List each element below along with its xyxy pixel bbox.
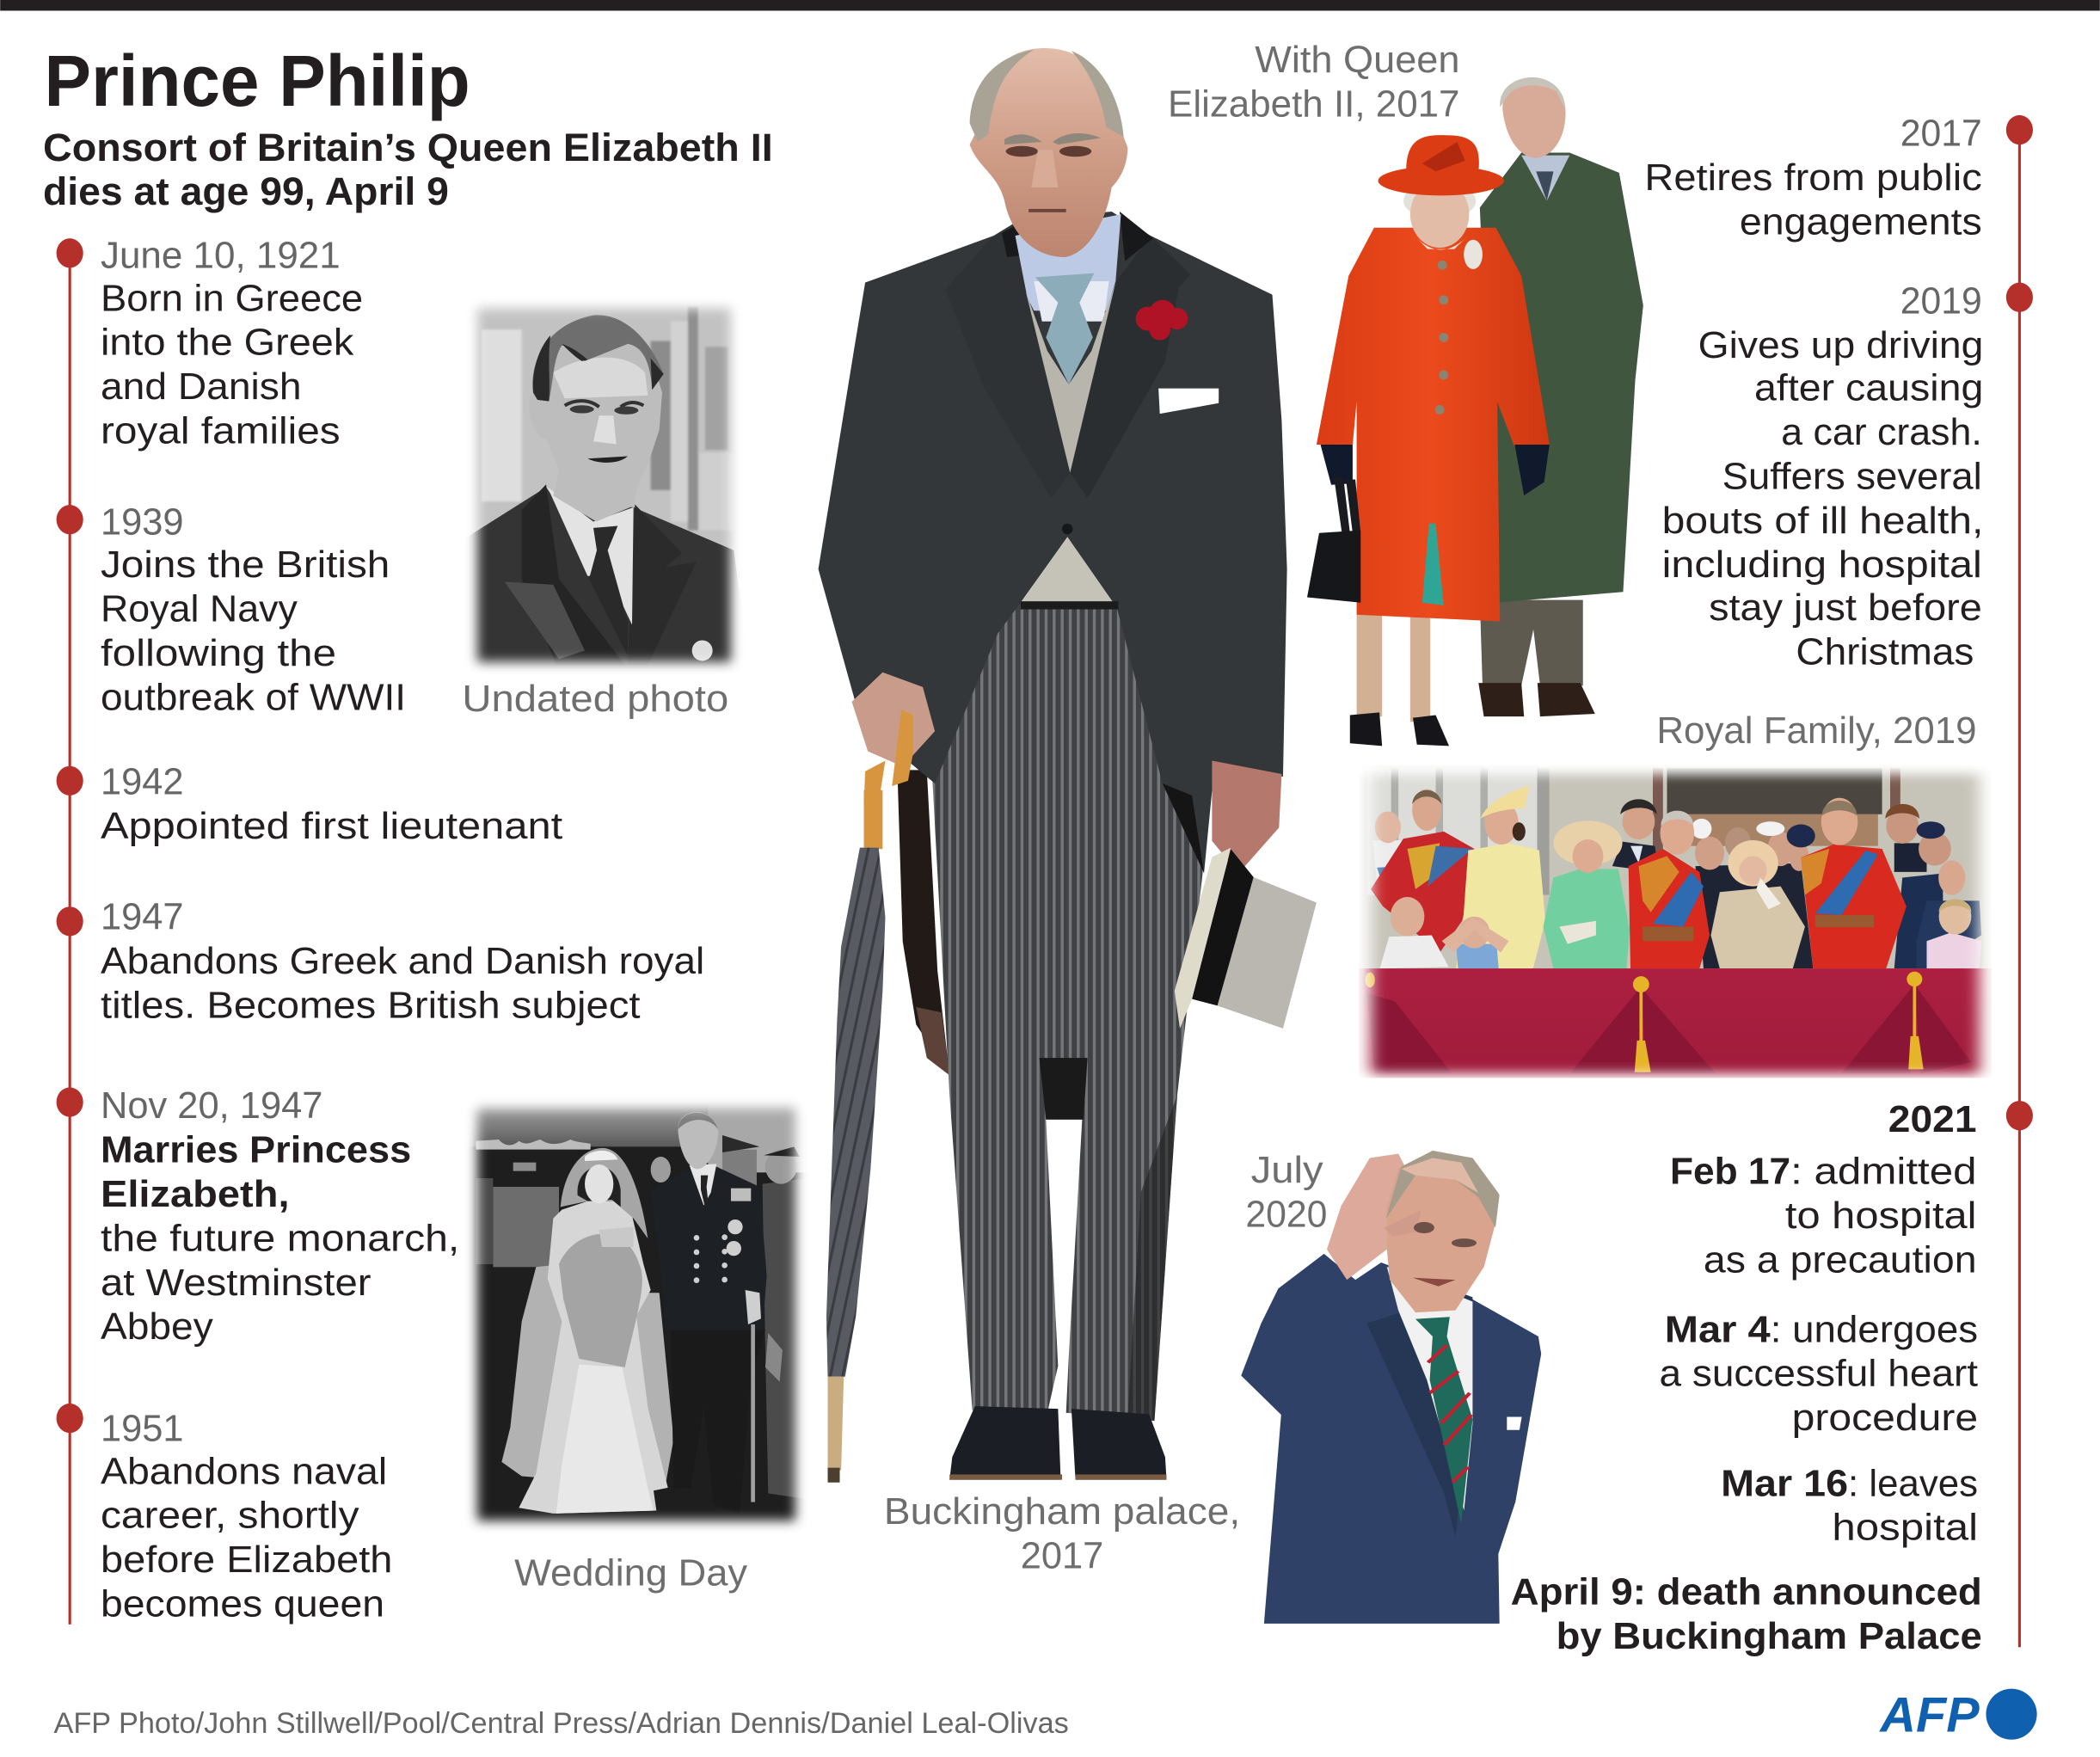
entry: Nov 20, 1947: Abbey <box>101 1306 213 1348</box>
Kate in yellow <box>1456 843 1545 968</box>
photo: main figure of Prince Philip with umbrella and top hat <box>819 48 1317 1483</box>
entry: 1939: following the <box>101 633 336 674</box>
shoes <box>949 1406 1166 1480</box>
guards behind <box>762 1180 800 1498</box>
Mar 16: Mar 16 <box>1721 1463 1848 1504</box>
baby in white <box>1372 840 1402 880</box>
entry: 2019: Christmas <box>1796 631 1974 673</box>
Mar 16 <box>1721 1463 1978 1549</box>
caption: Buckingham palace: Buckingham palace, <box>884 1491 1240 1533</box>
entry: Nov 20, 1947 <box>101 1085 459 1348</box>
entry: 1951: Abandons naval <box>101 1451 387 1492</box>
left hand on cane <box>852 673 935 803</box>
entry: 1947 <box>101 897 704 1026</box>
caption: July 2020: 2020 <box>1245 1194 1327 1235</box>
shirt collar <box>1016 214 1121 310</box>
carnation <box>1136 300 1188 341</box>
entry: Nov 20, 1947: Elizabeth, <box>101 1174 290 1215</box>
AFP logo <box>1878 1687 2037 1742</box>
entry: Nov 20, 1947: the future monarch, <box>101 1218 459 1259</box>
entry: 2019: a car crash. <box>1781 412 1982 453</box>
entry: 1951: before Elizabeth <box>101 1539 392 1581</box>
tailcoat jacket <box>819 212 1287 873</box>
photo: undated portrait <box>464 292 751 679</box>
Feb 17: Feb 17 <box>1670 1152 1790 1193</box>
entry: 2019: stay just before <box>1709 587 1982 629</box>
entry: 1942: Appointed first lieutenant <box>101 806 562 847</box>
entry: 1951 <box>101 1409 392 1625</box>
caption: Buckingham palace: 2017 <box>1021 1535 1103 1576</box>
caption: with Queen: Elizabeth II, 2017 <box>1168 83 1459 125</box>
caption: July 2020: July <box>1251 1150 1323 1191</box>
caption: with Queen: With Queen <box>1255 40 1459 81</box>
entry: 2019 <box>1662 280 1983 673</box>
caption: undated photo: Undated photo <box>462 679 728 720</box>
entry: 2021: 2021 <box>1888 1099 1977 1140</box>
Queen in orange coat <box>1307 135 1550 746</box>
entry: 2019: including hospital <box>1662 544 1982 586</box>
background royals <box>1612 799 1951 968</box>
entry: 1951: becomes queen <box>101 1583 384 1625</box>
caption: July 2020 <box>1245 1150 1327 1235</box>
title block <box>43 40 773 213</box>
tailcoat tail behind trousers <box>897 770 949 1075</box>
Charles in red uniform <box>1629 849 1710 968</box>
right hand <box>1212 760 1281 873</box>
subtitle: Consort of Britain’s Queen Elizabeth II <box>43 126 773 169</box>
entry: 1951: career, shortly <box>101 1496 359 1537</box>
caption: wedding day: Wedding Day <box>514 1553 747 1594</box>
entry: 2019: Gives up driving <box>1698 325 1983 366</box>
photo: Royal Family on balcony <box>1359 765 1992 1078</box>
entry: Nov 20, 1947: Nov 20, 1947 <box>101 1085 322 1127</box>
entry: 1939: Royal Navy <box>101 589 298 630</box>
entry: 2021 <box>1511 1099 1982 1657</box>
entry: 1942: 1942 <box>101 761 184 802</box>
entry: 2017 <box>1644 114 1982 243</box>
entry: 2019: after causing <box>1754 368 1983 409</box>
AFP logo: AFP <box>1878 1687 1980 1742</box>
gold tassels <box>1365 972 1924 1072</box>
entry: June 10, 1921: into the Greek <box>101 323 353 364</box>
children right <box>1917 900 1981 968</box>
photo: Philip waving, July 2020 <box>1241 1151 1541 1624</box>
entry: Nov 20, 1947: at Westminster <box>101 1262 371 1304</box>
entry: 1939: 1939 <box>101 501 184 543</box>
Mar 4: : undergoes <box>1771 1309 1978 1350</box>
left timeline line and dots <box>57 238 83 1625</box>
head <box>970 48 1127 257</box>
umbrella <box>826 790 885 1483</box>
entry: Nov 20, 1947: Marries Princess <box>101 1130 411 1171</box>
subtitle <box>43 126 773 213</box>
Feb 17: to hospital <box>1785 1195 1977 1237</box>
entry: 2019: 2019 <box>1900 280 1982 322</box>
groom <box>672 1330 765 1445</box>
entry: June 10, 1921: and Danish <box>101 366 302 408</box>
entry: 2017: Retires from public <box>1644 157 1982 199</box>
entry: 1947: 1947 <box>101 897 184 938</box>
April 9 <box>1511 1571 1982 1657</box>
Feb 17: as a precaution <box>1704 1239 1977 1281</box>
Queen in cream <box>1710 887 1805 968</box>
entry: 2019: bouts of ill health, <box>1662 501 1983 542</box>
pocket square <box>1158 389 1219 414</box>
entry: June 10, 1921: Born in Greece <box>101 278 363 319</box>
right timeline line and dots <box>2006 115 2033 1647</box>
Mar 16: hospital <box>1832 1508 1978 1549</box>
Feb 17 <box>1670 1152 1977 1281</box>
April 9: by Buckingham Palace <box>1557 1616 1982 1657</box>
entry: 1939 <box>101 501 406 718</box>
entry: 2017: 2017 <box>1900 114 1982 155</box>
tie <box>1035 273 1094 384</box>
striped trousers <box>923 603 1203 1421</box>
top hat <box>1175 848 1317 1029</box>
William <box>1371 832 1474 953</box>
Mar 16: : leaves <box>1848 1463 1978 1504</box>
entry: 1947: titles. Becomes British subject <box>101 985 641 1026</box>
April 9: April 9: death announced <box>1511 1571 1982 1613</box>
entry: June 10, 1921 <box>101 235 363 452</box>
photo: Philip and the Queen <box>1307 77 1643 746</box>
entry: 1947: Abandons Greek and Danish royal <box>101 941 704 982</box>
Mar 4: Mar 4 <box>1665 1309 1771 1350</box>
photo: wedding day <box>464 1092 808 1539</box>
entry: 1939: outbreak of WWII <box>101 677 406 718</box>
top bar <box>0 0 2100 10</box>
caption: Buckingham palace <box>884 1491 1240 1576</box>
Philip in green coat <box>1478 77 1643 716</box>
entry: 1942 <box>101 761 562 847</box>
entry: 1951: 1951 <box>101 1409 184 1450</box>
entry: June 10, 1921: royal families <box>101 410 341 452</box>
train <box>501 1264 673 1488</box>
bride <box>519 1201 668 1514</box>
Feb 17: : admitted <box>1790 1152 1977 1193</box>
entry: June 10, 1921: June 10, 1921 <box>101 235 341 276</box>
waistcoat <box>1026 283 1115 473</box>
Mar 4 <box>1660 1309 1978 1439</box>
Mar 4: a successful heart <box>1660 1354 1978 1395</box>
title: Prince Philip <box>45 40 470 121</box>
entry: 1939: Joins the British <box>101 544 390 586</box>
Mar 4: procedure <box>1792 1398 1978 1439</box>
Camilla in mint <box>1544 869 1630 968</box>
entry: 2017: engagements <box>1740 202 1982 243</box>
Andrew in red uniform <box>1801 845 1907 968</box>
caption: royal family: Royal Family, 2019 <box>1656 710 1977 752</box>
entry: 2019: Suffers several <box>1722 456 1982 497</box>
caption: with Queen <box>1168 40 1459 125</box>
subtitle: dies at age 99, April 9 <box>43 169 449 213</box>
credits: AFP Photo/John Stillwell/Pool/Central Press/Adrian Dennis/Daniel Leal-Olivas <box>53 1707 1069 1740</box>
red balcony drape <box>1359 968 1992 1078</box>
George and Louis <box>1379 936 1449 968</box>
